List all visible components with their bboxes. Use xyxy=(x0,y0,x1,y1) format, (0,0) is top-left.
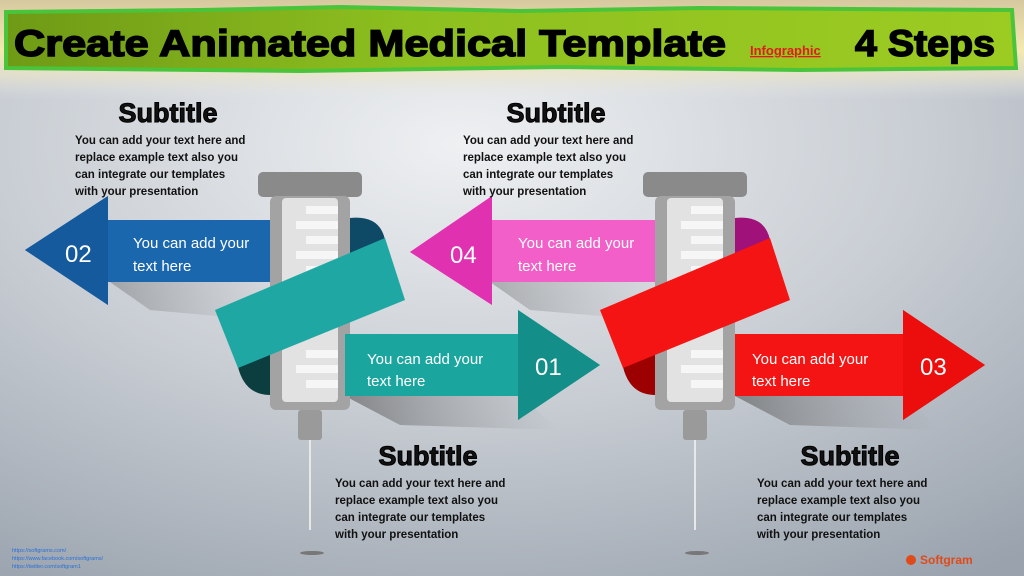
arrow 01 teal xyxy=(345,310,600,420)
arrow 02 blue xyxy=(25,196,272,305)
text block 04: can integrate our templates xyxy=(463,169,613,181)
text block 03: You can add your text here and xyxy=(757,478,927,490)
text block 04: replace example text also you xyxy=(463,152,626,164)
syringe 1 xyxy=(215,172,405,555)
text block 02: can integrate our templates xyxy=(75,169,225,181)
title banner: Infographic xyxy=(750,43,821,58)
text block 02: with your presentation xyxy=(74,186,198,198)
text block 02 xyxy=(74,98,245,198)
arrow 03 red: 03 xyxy=(920,354,947,381)
text block 03 xyxy=(756,441,927,541)
text block 02: Subtitle xyxy=(118,98,218,128)
arrow 03 red: You can add your xyxy=(752,351,868,368)
text block 03: Subtitle xyxy=(800,441,900,471)
arrow 02 blue: text here xyxy=(133,258,191,275)
text block 04 xyxy=(462,98,633,198)
title banner: 4 Steps xyxy=(855,23,995,64)
text block 03: replace example text also you xyxy=(757,495,920,507)
text block 01: Subtitle xyxy=(378,441,478,471)
title banner: Create Animated Medical Template xyxy=(14,23,726,64)
text block 04: Subtitle xyxy=(506,98,606,128)
links: https://www.facebook.com/softgrams/ xyxy=(12,556,104,562)
text block 01 xyxy=(334,441,505,541)
links: https://twitter.com/softgram1 xyxy=(12,564,81,570)
text block 01: replace example text also you xyxy=(335,495,498,507)
shadows xyxy=(110,282,940,430)
text block 02: replace example text also you xyxy=(75,152,238,164)
arrow 01 teal: 01 xyxy=(535,354,562,381)
arrow 04 pink: 04 xyxy=(450,242,477,269)
text block 01: with your presentation xyxy=(334,529,458,541)
arrow 04 pink xyxy=(410,196,658,305)
text block 03: with your presentation xyxy=(756,529,880,541)
syringe 2 xyxy=(600,172,790,555)
arrow 02 blue: You can add your xyxy=(133,235,249,252)
text block 01: can integrate our templates xyxy=(335,512,485,524)
arrow 03 red xyxy=(735,310,985,420)
text block 02: You can add your text here and xyxy=(75,135,245,147)
text block 01: You can add your text here and xyxy=(335,478,505,490)
arrow 02 blue: 02 xyxy=(65,241,92,268)
text block 04: You can add your text here and xyxy=(463,135,633,147)
logo: Softgram xyxy=(920,553,973,567)
links: https://softgrams.com/ xyxy=(12,548,67,554)
arrow 04 pink: You can add your xyxy=(518,235,634,252)
arrow 01 teal: text here xyxy=(367,373,425,390)
arrow 01 teal: You can add your xyxy=(367,351,483,368)
arrow 03 red: text here xyxy=(752,373,810,390)
title banner xyxy=(6,7,1016,71)
text block 04: with your presentation xyxy=(462,186,586,198)
arrow 04 pink: text here xyxy=(518,258,576,275)
text block 03: can integrate our templates xyxy=(757,512,907,524)
links xyxy=(12,548,104,570)
